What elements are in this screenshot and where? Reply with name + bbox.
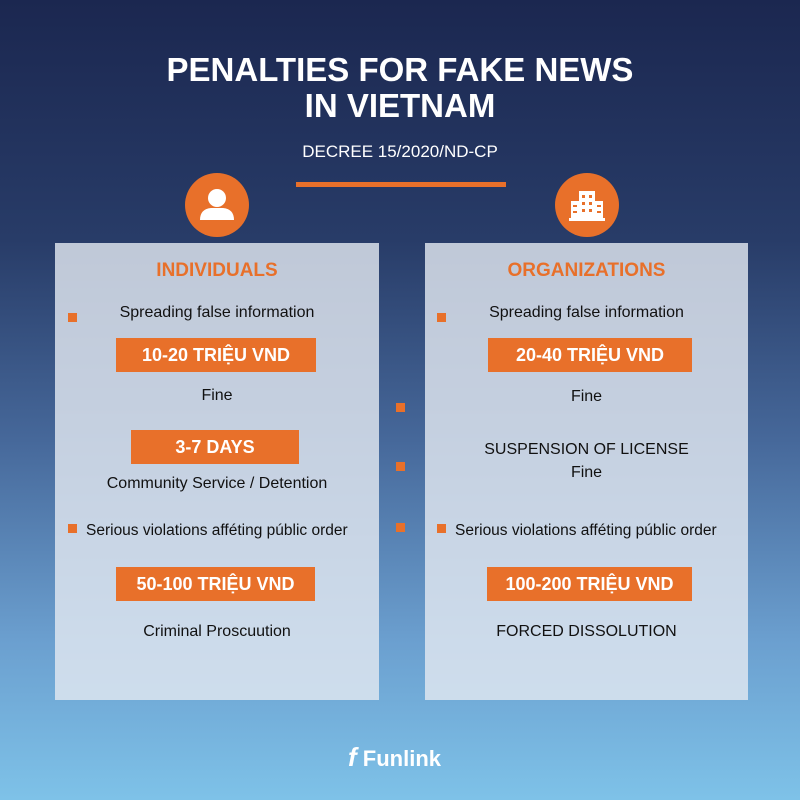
fine box: 10-20 TRIỆU VND [142,345,290,365]
fine box [116,338,316,372]
criminal box [116,567,315,601]
logo: funlink: f Funlink [348,742,441,772]
criminal box: 50-100 TRIỆU VND [136,574,295,594]
text: spreading: Spreading false information [120,304,314,321]
days box [131,430,299,464]
dissolution box [487,567,692,601]
title: IN VIETNAM [305,87,495,124]
text: dissolution: FORCED DISSOLUTION [496,623,677,640]
divider line [296,182,506,187]
bullet [68,313,77,322]
text: serious: Serious violations afféting públic order [455,522,717,539]
bullet [437,313,446,322]
icon: building [555,173,619,237]
panel: individuals [55,243,379,700]
text: spreading: Spreading false information [489,304,684,321]
fine box [488,338,692,372]
text: suspension: SUSPENSION OF LICENSE [484,441,689,458]
text: community: Community Service / Detention [107,475,327,492]
text: suspension: Fine [571,464,602,481]
subtitle: DECREE 15/2020/ND-CP [302,142,498,161]
heading: individuals: INDIVIDUALS [156,260,278,281]
bullet [68,524,77,533]
text: suspension [484,441,689,481]
icon: person [185,173,249,237]
heading: organizations: ORGANIZATIONS [508,260,665,281]
text: fine: Fine [201,387,233,404]
panel: organizations [425,243,748,700]
gap bullets [396,403,405,532]
title: PENALTIES FOR FAKE NEWS [167,51,633,88]
title [167,51,633,124]
days box: 3-7 DAYS [175,437,255,457]
text: fine: Fine [571,388,602,405]
bullet [437,524,446,533]
text: criminal: Criminal Proscuution [143,623,291,640]
text: serious: Serious violations afféting públic order [86,522,348,539]
dissolution box: 100-200 TRIỆU VND [505,574,674,594]
fine box: 20-40 TRIỆU VND [516,345,664,365]
